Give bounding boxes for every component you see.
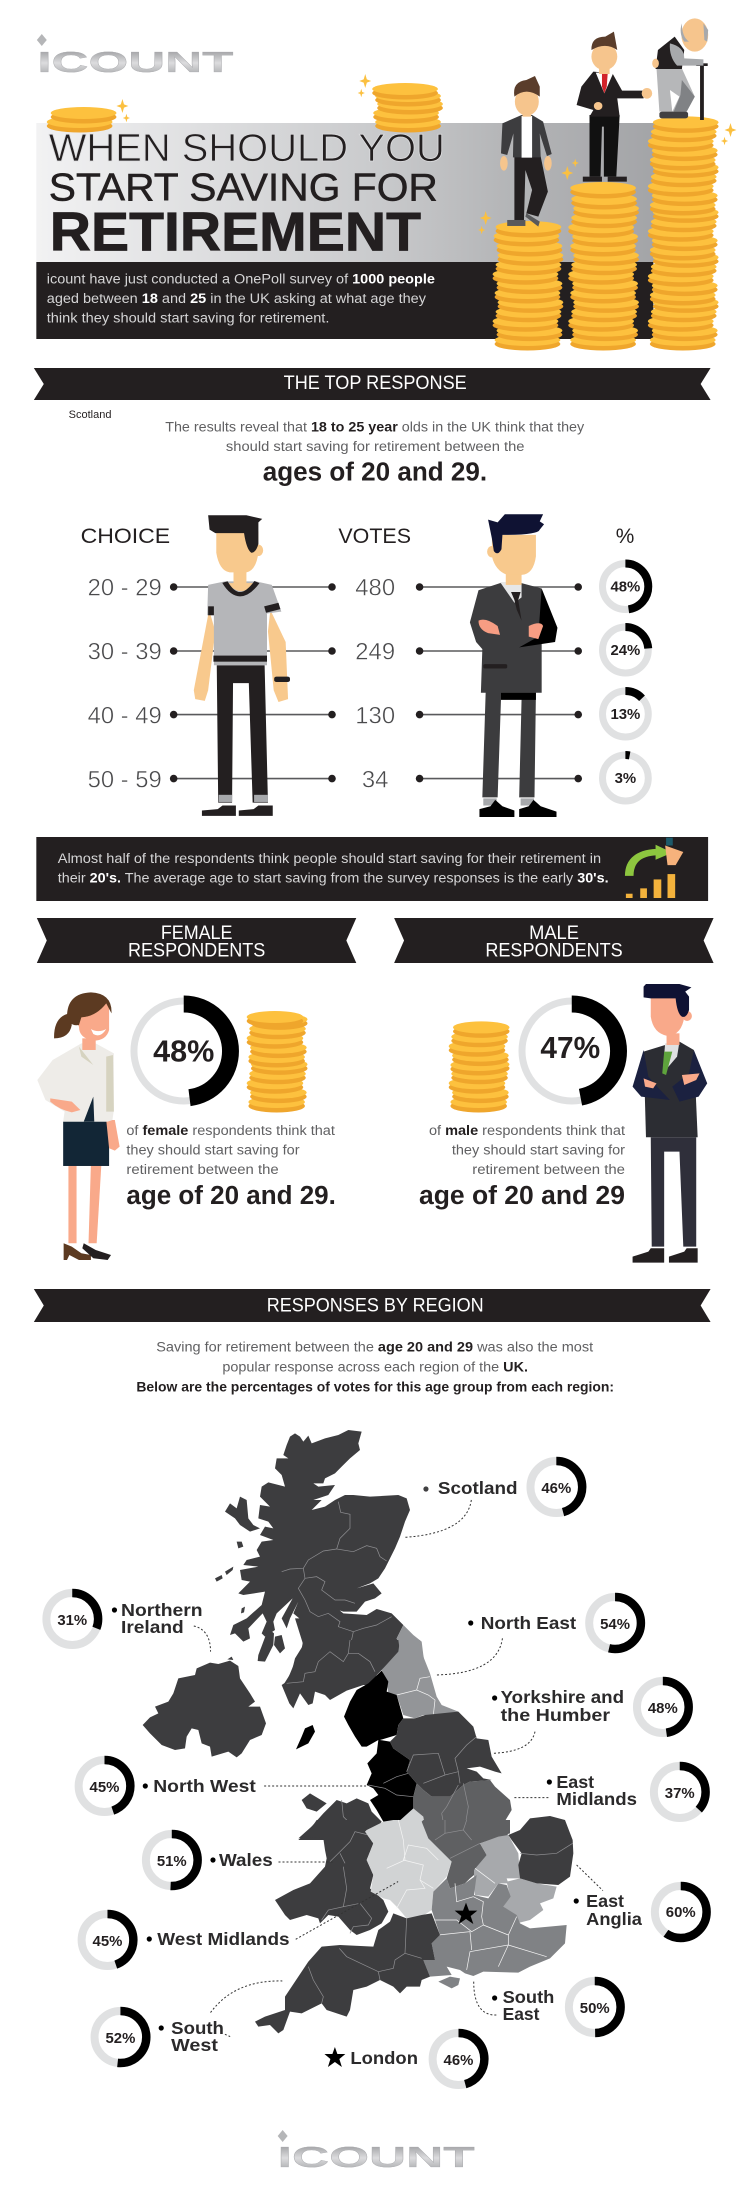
votes column: 480	[355, 575, 395, 602]
donut: 48%: 48%	[610, 578, 640, 596]
region: Northern Ireland	[46, 1593, 203, 1645]
region: East Anglia	[574, 1886, 707, 1938]
donut: 13%: 13%	[610, 706, 640, 723]
map region: South West	[255, 1913, 440, 2033]
donut: female 48%	[134, 1001, 233, 1101]
connector lines	[170, 583, 582, 782]
region: London	[324, 2033, 484, 2085]
title: WHEN SHOULD YOU	[49, 127, 445, 170]
region: North West: 45%	[90, 1779, 119, 1796]
region: East Midlands: Midlands	[556, 1789, 637, 1809]
banner: male respondents	[394, 918, 714, 963]
male text: retirement between the	[472, 1161, 625, 1177]
choice column: 20 - 29	[88, 575, 162, 602]
donut: 24%	[603, 627, 648, 673]
icon: growth arrow with coins	[626, 838, 683, 898]
region: Scotland: 46%	[541, 1480, 571, 1497]
region: London: 46%	[444, 2052, 473, 2069]
map region: Northern Ireland	[143, 1661, 266, 1757]
donut: 3%	[603, 755, 648, 801]
map region: North Wales	[298, 1798, 382, 1840]
small coin stack left	[47, 99, 130, 132]
map region: East Midlands	[413, 1780, 512, 1840]
region: East Anglia: Anglia	[586, 1909, 643, 1929]
choice column: 50 - 59	[88, 766, 162, 793]
banner: male respondents: RESPONDENTS	[485, 941, 623, 962]
figure: man in navy suit	[633, 984, 707, 1263]
map region: Wales	[275, 1820, 388, 1935]
coin stack 2	[561, 159, 639, 350]
map region: Yorkshire and the Humber	[390, 1712, 502, 1797]
figure: young man in t-shirt	[194, 515, 290, 816]
intro text: icount have just conducted a OnePoll survey of 1000 people	[47, 270, 435, 287]
region: West Midlands: West Midlands	[157, 1929, 290, 1949]
region: South West: South	[171, 2018, 224, 2038]
map region: East of England	[474, 1835, 520, 1897]
votes column: 130	[355, 702, 395, 729]
region: North East	[468, 1597, 641, 1649]
map: southern England and Wales	[255, 1816, 573, 2033]
male text	[419, 1122, 625, 1210]
region: Northern Ireland: Ireland	[121, 1617, 184, 1637]
region: South East: East	[503, 2004, 539, 2024]
votes column: 34	[362, 766, 388, 793]
coin stack 1	[478, 211, 563, 350]
region: South East	[492, 1981, 621, 2033]
region: East Midlands: 37%	[665, 1785, 695, 1802]
map region: North East	[382, 1640, 458, 1718]
figure: man in suit arms crossed	[470, 514, 557, 817]
region: East Midlands	[547, 1766, 706, 1818]
female text: they should start saving for	[126, 1141, 300, 1158]
region: Scotland: Scotland	[438, 1478, 518, 1498]
region: West Midlands: 45%	[93, 1933, 122, 1950]
table headers	[81, 525, 634, 548]
callout text: Almost half of the respondents think people should start saving for their retirement in	[58, 850, 601, 866]
banner: responses by region: RESPONSES BY REGION	[267, 1296, 484, 1317]
logo: icount top: ICOUNT	[37, 47, 234, 79]
top response intro text: should start saving for retirement between the	[226, 438, 525, 454]
region: South West: 52%	[105, 2030, 135, 2047]
banner: female respondents: RESPONDENTS	[128, 941, 265, 962]
male text: they should start saving for	[452, 1141, 625, 1158]
donut: 3%: 3%	[615, 770, 636, 787]
header panel: dark intro band	[36, 262, 653, 339]
intro text: aged between 18 and 25 in the UK asking at what age they	[47, 290, 426, 306]
callout text: their 20's. The average age to start saving from the survey responses is the early 30's.	[58, 869, 609, 886]
donut: 48%	[603, 564, 648, 610]
votes column	[355, 575, 395, 793]
intro text	[47, 270, 435, 326]
map region: South East	[423, 1875, 567, 1977]
region: Yorkshire and the Humber: 48%	[648, 1700, 678, 1717]
region intro text: Below are the percentages of votes for this age group from each region:	[136, 1379, 614, 1395]
map region: East Midlands lower	[422, 1820, 510, 1888]
region: Scotland	[423, 1461, 582, 1513]
coin stack: male	[449, 1021, 510, 1112]
region: East Anglia: East	[586, 1891, 624, 1911]
map: Scotland	[215, 1430, 428, 1685]
donut: female 48%: 48%	[153, 1034, 214, 1069]
map region: West Midlands	[365, 1820, 452, 1918]
donut: 24%: 24%	[610, 642, 640, 659]
region: North East: 54%	[600, 1616, 630, 1633]
banner: female respondents	[37, 918, 356, 963]
logo: icount bottom: ICOUNT	[278, 2142, 475, 2174]
figure: man in suit on coins	[577, 32, 652, 182]
coin stack: female	[247, 1011, 307, 1112]
region: South East: 50%	[580, 2000, 610, 2017]
map region: West Midlands top	[367, 1808, 437, 1840]
banner: female respondents: FEMALE	[161, 923, 232, 944]
leader lines	[194, 1500, 603, 2037]
female text	[126, 1122, 336, 1210]
region: Yorkshire and the Humber: the Humber	[501, 1705, 610, 1725]
banner: male respondents: MALE	[529, 923, 579, 944]
region: South West: West	[171, 2035, 218, 2055]
choice column: 40 - 49	[88, 702, 162, 729]
region intro text: popular response across each region of the UK.	[222, 1359, 528, 1375]
table headers: %	[616, 525, 634, 548]
map: UK regions	[143, 1430, 573, 2033]
region: South West	[95, 2011, 224, 2063]
region: London: London	[350, 2048, 418, 2068]
logo: icount bottom	[278, 2130, 475, 2174]
map region: Isle of Wight	[438, 1977, 460, 1988]
region: Yorkshire and the Humber	[492, 1681, 689, 1733]
callout text	[58, 850, 609, 886]
map region: East Anglia	[508, 1816, 573, 1885]
coin stack 3	[648, 116, 736, 351]
region: Northern Ireland: 31%	[57, 1612, 87, 1629]
map region: southern Scotland	[282, 1640, 400, 1708]
region: North West	[79, 1760, 256, 1812]
region: South East: South	[503, 1987, 554, 2007]
region: Wales: 51%	[157, 1853, 187, 1870]
donut: 13%	[603, 691, 648, 737]
female text: age of 20 and 29.	[126, 1182, 336, 1210]
table headers: VOTES	[338, 525, 411, 548]
stray label: Scotland	[69, 409, 111, 421]
region: North East: North East	[481, 1613, 576, 1633]
small coin stack middle	[358, 74, 443, 132]
female text: of female respondents think that	[126, 1122, 335, 1138]
donut: male 47%: 47%	[540, 1030, 600, 1065]
banner: responses by region	[34, 1289, 711, 1322]
choice column: 30 - 39	[88, 639, 162, 666]
map region: Isle of Man	[296, 1725, 315, 1749]
header panel: gradient title band	[36, 123, 657, 262]
region: East Midlands: East	[556, 1772, 594, 1792]
female text: retirement between the	[126, 1161, 279, 1177]
map: northern England, Northern Ireland, Man	[143, 1640, 512, 1840]
map region: Anglesey	[302, 1793, 327, 1812]
top response intro text	[165, 418, 584, 487]
title: RETIREMENT	[50, 201, 421, 263]
icon: London star on map	[455, 1903, 477, 1924]
figure: young man on coins	[500, 76, 552, 227]
intro text: think they should start saving for retirement.	[47, 309, 329, 326]
male text: of male respondents think that	[429, 1122, 625, 1138]
callout panel: almost half	[36, 837, 708, 901]
logo: icount top	[37, 34, 234, 79]
banner: the top response	[34, 368, 711, 400]
title: START SAVING FOR	[49, 167, 438, 210]
region: East Anglia: 60%	[666, 1904, 696, 1921]
title	[49, 127, 445, 263]
region intro text: Saving for retirement between the age 20 and 29 was also the most	[156, 1339, 593, 1355]
figure: woman	[37, 992, 120, 1260]
region: Yorkshire and the Humber: Yorkshire and	[501, 1687, 624, 1707]
map region: North West	[344, 1671, 417, 1823]
votes column: 249	[355, 639, 395, 666]
region: Northern Ireland: Northern	[121, 1600, 203, 1620]
choice column	[88, 575, 162, 793]
region: Wales: Wales	[219, 1850, 273, 1870]
top response intro text: ages of 20 and 29.	[263, 459, 487, 487]
donut: male 47%	[522, 1001, 622, 1101]
region: North West: North West	[153, 1776, 256, 1796]
region intro text	[136, 1339, 614, 1395]
table headers: CHOICE	[81, 525, 170, 548]
region: Wales	[146, 1834, 273, 1886]
top response intro text: The results reveal that 18 to 25 year olds in the UK think that they	[165, 418, 584, 434]
region: West Midlands	[82, 1914, 290, 1966]
figure: elderly man on coins	[652, 18, 708, 120]
male text: age of 20 and 29	[419, 1182, 625, 1210]
banner: the top response: THE TOP RESPONSE	[284, 373, 467, 394]
